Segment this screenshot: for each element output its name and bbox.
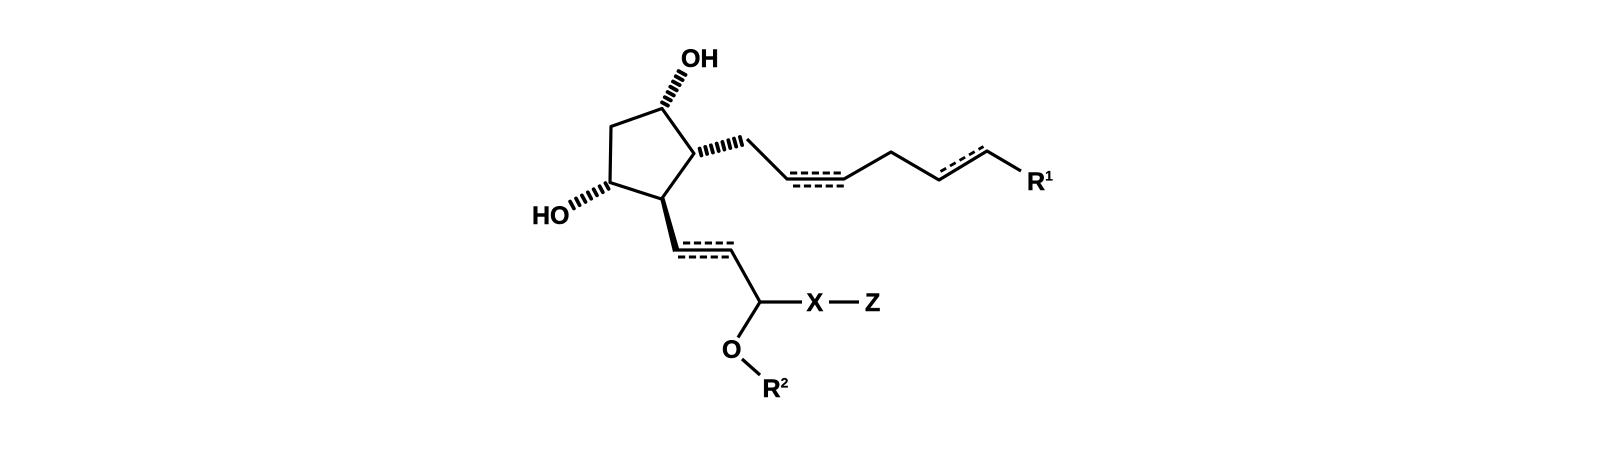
solid wedge bond bbox=[660, 198, 680, 252]
hashed bond to lower HO bbox=[570, 183, 609, 208]
label: O: O bbox=[722, 336, 741, 364]
label: R1: 1 bbox=[1045, 168, 1053, 184]
cyclopentane ring bbox=[610, 108, 694, 199]
label: Z: Z bbox=[865, 289, 880, 317]
hashed bond to upper OH bbox=[662, 71, 686, 106]
hashed bond to upper side chain bbox=[700, 137, 742, 155]
label: X: X bbox=[806, 289, 824, 317]
label: OH: OH bbox=[681, 45, 718, 73]
label: R2: 2 bbox=[781, 374, 789, 390]
lower side chain bonds bbox=[675, 243, 859, 375]
label: HO: HO bbox=[532, 202, 570, 230]
upper side chain bonds bbox=[747, 139, 1021, 186]
label: R1: R bbox=[1027, 168, 1045, 196]
label: R2: R bbox=[762, 375, 781, 403]
